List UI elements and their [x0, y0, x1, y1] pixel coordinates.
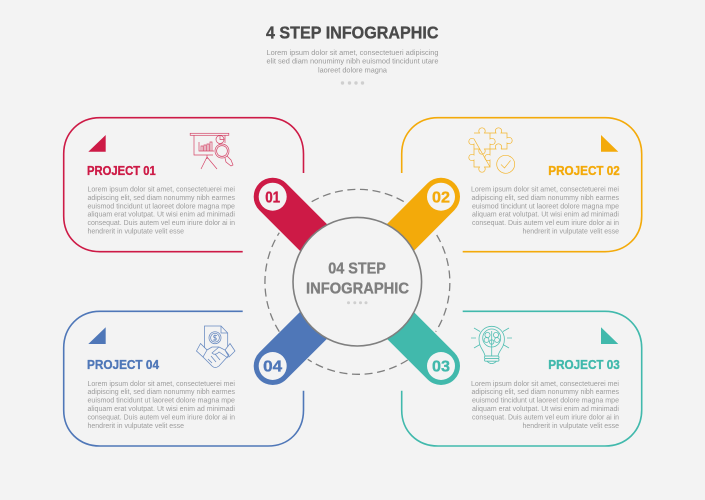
body text 04: consequat. Duis autem vel eum iriure dolor ai in	[88, 412, 235, 421]
title block	[266, 22, 439, 85]
body text 04: hendrerit in vulputate velit esse	[88, 421, 184, 430]
body text 01	[88, 184, 235, 236]
central diagram	[259, 183, 455, 380]
body text 03: aliquam erat volutpat. Ut wisi enim ad minimadi	[472, 404, 619, 413]
body text 02: Lorem ipsum dolor sit amet, consectetuerei mei	[471, 184, 619, 194]
heading 04: PROJECT 04	[87, 358, 159, 372]
body text 01: Lorem ipsum dolor sit amet, consectetuerei mei	[88, 184, 235, 194]
subtitle text: Lorem ipsum dolor sit amet, consectetueri adipiscing	[266, 48, 438, 57]
pill 02	[374, 183, 455, 264]
corner triangle 04	[88, 327, 106, 344]
pill 04: 04	[263, 359, 283, 376]
body text 01: aliquam erat volutpat. Ut wisi enim ad minimadi	[88, 210, 235, 219]
body text 02: euismod tincidunt ut laoreet dolore magna mpe	[472, 201, 619, 210]
pill 02: 02	[432, 189, 450, 206]
center label	[306, 260, 409, 297]
panel: project 03	[402, 311, 642, 446]
body text 03: adipiscing elit, sed diam nonummy nibh earmes	[472, 387, 619, 396]
panel: project 02	[402, 118, 642, 252]
subtitle text: laoreet dolore magna	[318, 65, 388, 74]
body text 04: euismod tincidunt ut laoreet dolore magna mpe	[88, 396, 235, 405]
title: 4 STEP INFOGRAPHIC	[266, 22, 439, 42]
pill 04	[259, 299, 340, 380]
panel: project 04	[64, 311, 304, 446]
subtitle text	[266, 48, 438, 74]
icon: puzzle with check	[469, 128, 515, 173]
body text 01: euismod tincidunt ut laoreet dolore magna mpe	[88, 201, 235, 210]
heading 01: PROJECT 01	[87, 164, 156, 178]
pill 03: 03	[432, 359, 450, 376]
icon: light bulb	[471, 326, 512, 364]
body text 01: hendrerit in vulputate velit esse	[88, 226, 184, 236]
center label: INFOGRAPHIC	[306, 280, 409, 297]
card outline 02	[402, 118, 642, 252]
icon: presentation board	[190, 133, 233, 169]
title dots	[341, 81, 364, 85]
panel: project 01	[64, 118, 304, 252]
pill 01	[259, 183, 340, 264]
body text 03: Lorem ipsum dolor sit amet, consectetuerei mei	[471, 379, 619, 388]
body text 04	[88, 379, 235, 430]
body text 04: adipiscing elit, sed diam nonummy nibh earmes	[88, 387, 235, 396]
center circle	[293, 217, 422, 346]
body text 03: hendrerit in vulputate velit esse	[522, 421, 619, 430]
dashed ring	[265, 189, 450, 374]
card outline 04	[64, 311, 304, 446]
body text 01: consequat. Duis autem vel eum iriure dolor ai in	[88, 218, 235, 227]
corner triangle 02	[601, 135, 618, 152]
corner triangle 01	[88, 135, 106, 152]
center dots	[347, 301, 368, 304]
body text 04: Lorem ipsum dolor sit amet, consectetuerei mei	[88, 379, 235, 388]
card outline 01	[64, 118, 304, 252]
pill 03	[374, 299, 455, 380]
body text 03: consequat. Duis autem vel eum iriure dolor ai in	[472, 412, 619, 421]
heading 03: PROJECT 03	[548, 358, 620, 372]
card outline 03	[402, 311, 642, 446]
body text 02: aliquam erat volutpat. Ut wisi enim ad minimadi	[472, 210, 619, 219]
body text 02: consequat. Duis autem vel eum iriure dolor ai in	[472, 218, 619, 227]
body text 02: hendrerit in vulputate velit esse	[522, 226, 619, 236]
body text 01: adipiscing elit, sed diam nonummy nibh earmes	[88, 193, 235, 202]
heading 02: PROJECT 02	[548, 164, 620, 178]
subtitle text: elit sed diam nonumimy nibh euismod tincidunt utare	[266, 57, 438, 66]
icon: handshake and document	[196, 326, 235, 368]
body text 04: aliquam erat volutpat. Ut wisi enim ad minimadi	[88, 404, 235, 413]
body text 02: adipiscing elit, sed diam nonummy nibh earmes	[472, 193, 619, 202]
center label: 04 STEP	[328, 260, 386, 277]
body text 02	[471, 184, 619, 236]
corner triangle 03	[601, 327, 618, 344]
pill 01: 01	[265, 189, 281, 206]
body text 03	[471, 379, 619, 430]
body text 03: euismod tincidunt ut laoreet dolore magna mpe	[472, 396, 619, 405]
